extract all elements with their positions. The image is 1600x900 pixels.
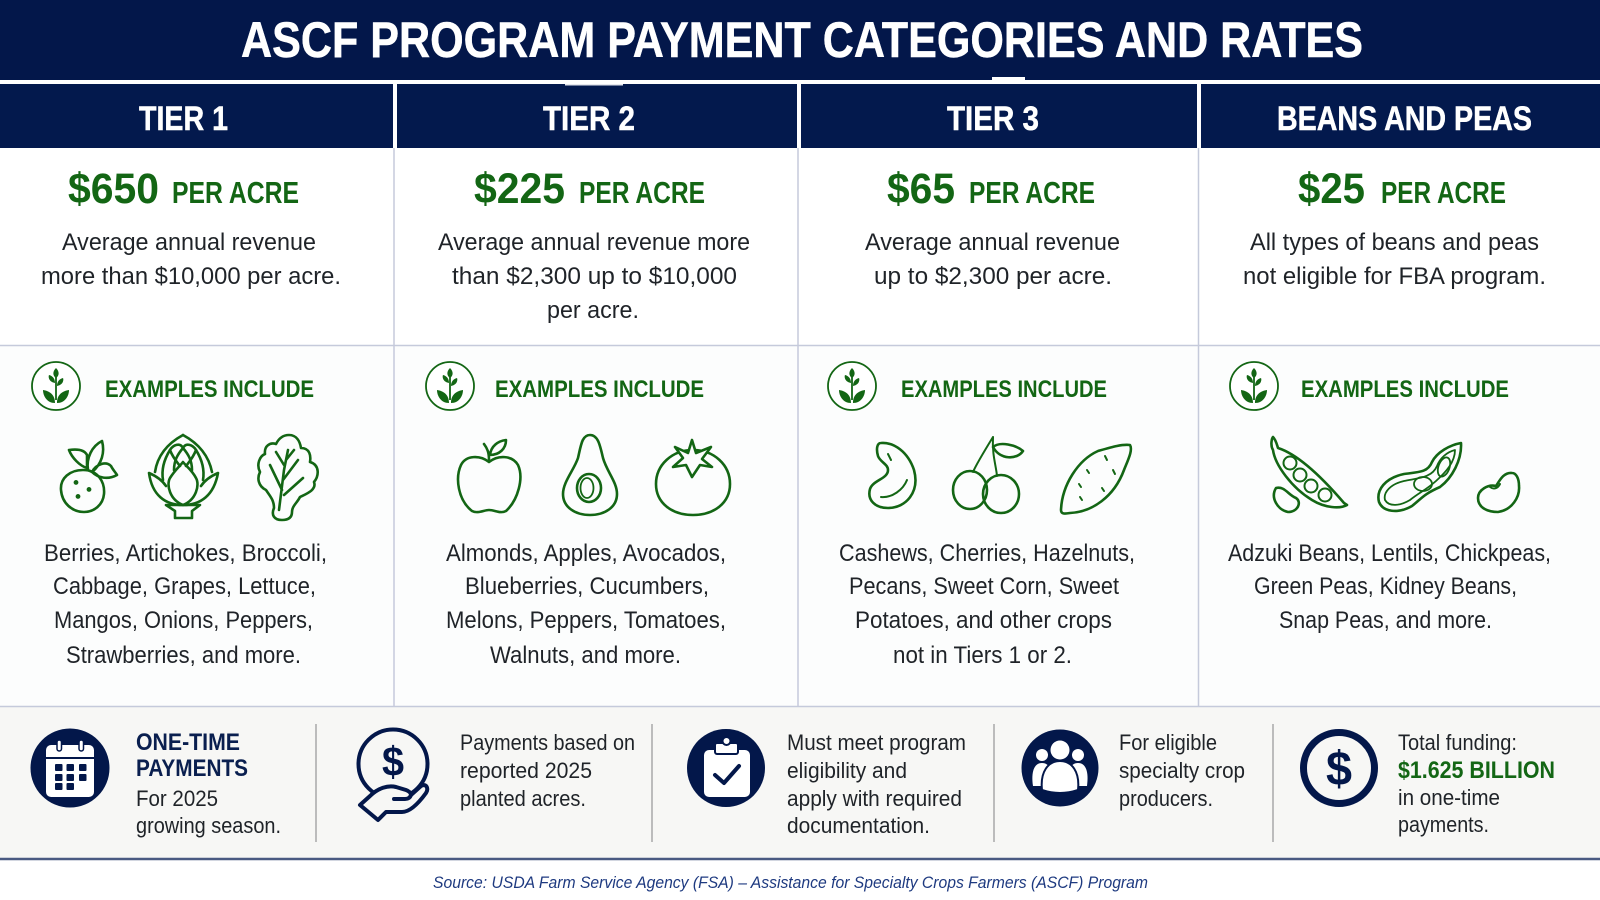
text: payments based on planted acres [460,730,635,811]
heading: examples include: EXAMPLES INCLUDE [105,376,314,403]
crop list: tier 3 [839,540,1135,669]
crop list: tier 2: Almonds, Apples, Avocados, [446,540,726,567]
crop list: tier 3: Potatoes, and other crops [855,607,1112,634]
description: tier 1 [41,229,341,290]
description: beans and peas [1243,229,1546,290]
icon: hand holding dollar [358,730,428,820]
description: tier 3 [865,229,1120,290]
icon: berry [61,441,117,512]
description: tier 3: up to $2,300 per acre. [874,263,1112,290]
examples panel: tier 2 [426,362,730,669]
column header: tier 2: TIER 2 [543,100,635,138]
icon: calendar [30,728,110,808]
title banner [0,0,1600,80]
icon: tomato [656,440,730,515]
fact: eligibility and documentation [687,729,966,838]
icon: plant badge [1230,362,1278,410]
column header: tier 3: TIER 3 [947,100,1039,138]
crop list: tier 3: Cashews, Cherries, Hazelnuts, [839,540,1135,567]
description: beans and peas: All types of beans and peas [1250,229,1539,256]
column header: beans and peas [1201,84,1600,148]
grid lines [0,148,1600,706]
rate: $225 per acre: $225 [474,165,565,213]
crop list: beans and peas: Adzuki Beans, Lentils, Chickpeas, [1228,540,1551,567]
icon: edamame pod [1378,443,1461,511]
text: total funding: payments. [1398,812,1489,837]
crop list: tier 1 [44,540,327,669]
rate: $25 per acre: $25 [1298,165,1365,213]
text: total funding: in one-time [1398,785,1500,810]
heading: examples include: EXAMPLES INCLUDE [1301,376,1509,403]
text: one-time payments: PAYMENTS [136,755,248,782]
icon: clipboard [687,729,765,807]
rate panel: tier 1 [41,165,341,290]
description: tier 2: than $2,300 up to $10,000 [452,263,737,290]
fact: payments based on planted acres [358,730,635,820]
description: beans and peas: not eligible for FBA program. [1243,263,1546,290]
description: tier 1: Average annual revenue [62,229,316,256]
crop list: tier 1: Berries, Artichokes, Broccoli, [44,540,327,567]
rate: $225 per acre: PER ACRE [579,175,705,210]
crop list: tier 3: not in Tiers 1 or 2. [893,642,1072,669]
text: payments based on planted acres: Payments based on [460,730,635,755]
crop list: beans and peas: Snap Peas, and more. [1279,607,1492,634]
fact: one-time payments [30,728,281,838]
fact: total funding [1304,730,1555,837]
text: eligible producers [1119,730,1245,811]
icon: hand holding dollar: $ [382,738,404,785]
crop list: tier 2: Walnuts, and more. [490,642,681,669]
text: payments based on planted acres: planted acres. [460,786,586,811]
text: eligibility and documentation [787,730,966,838]
description: tier 2: per acre. [547,297,639,324]
rate panel: tier 2 [438,165,750,324]
crop list: tier 1: Cabbage, Grapes, Lettuce, [53,573,316,600]
icon: apple [458,440,520,512]
rate panel: beans and peas [1243,165,1546,290]
crop list: tier 1: Strawberries, and more. [66,642,301,669]
crop list: tier 3: Pecans, Sweet Corn, Sweet [849,573,1119,600]
text: eligible producers: specialty crop [1119,758,1245,783]
text: one-time payments: ONE-TIME [136,729,240,756]
text: payments based on planted acres: reported 2025 [460,758,592,783]
text: eligible producers: For eligible [1119,730,1217,755]
text: eligibility and documentation: apply with required [787,786,962,811]
examples panel: tier 3 [828,362,1135,669]
fact: eligible producers [1022,730,1245,811]
rate: $225 per acre [474,165,705,213]
rate: $650 per acre [68,165,299,213]
heading: examples include: EXAMPLES INCLUDE [901,376,1107,403]
column header: tier 2 [397,84,797,148]
description: tier 1: more than $10,000 per acre. [41,263,341,290]
rate panel: tier 3 [865,165,1120,290]
icon: artichoke [149,435,218,518]
text: eligibility and documentation: Must meet program [787,730,966,755]
icon: lettuce [258,435,318,520]
crop list: tier 2: Blueberries, Cucumbers, [465,573,709,600]
text: total funding: Total funding: [1398,730,1517,755]
crop list: tier 2 [446,540,726,669]
icon: sweet potato [1061,445,1131,514]
icon: avocado [563,435,617,515]
text: eligibility and documentation: eligibility and [787,758,907,783]
source line: Source: USDA Farm Service Agency (FSA) – Assistance for Specialty Crops Farmers (ASCF) Program [433,873,1148,892]
icon: dollar coin [1304,732,1374,804]
crop list: beans and peas [1228,540,1551,634]
rate: $25 per acre [1298,165,1506,213]
rate: $65 per acre [887,165,1095,213]
column header: tier 3 [801,77,1197,148]
icon: dollar coin: $ [1326,743,1352,796]
description: tier 3: Average annual revenue [865,229,1120,256]
text: one-time payments [136,729,281,838]
icon: plant badge [32,362,80,410]
rate: $650 per acre: PER ACRE [172,175,299,210]
icon: cherries [953,437,1023,513]
examples panel: tier 1 [32,362,327,669]
icon: plant badge [828,362,876,410]
column header: tier 1 [0,84,393,148]
rate: $25 per acre: PER ACRE [1381,175,1506,210]
column header: tier 1: TIER 1 [139,100,228,138]
column header: beans and peas: BEANS AND PEAS [1277,100,1532,138]
text: total funding [1398,730,1555,837]
examples panel: beans and peas [1228,362,1551,634]
rate: $650 per acre: $650 [68,165,159,213]
icon: group of people [1022,730,1098,806]
text: eligible producers: producers. [1119,786,1213,811]
text: one-time payments: For 2025 [136,786,218,811]
crop list: tier 2: Melons, Peppers, Tomatoes, [446,607,726,634]
icon: cashew [869,443,915,508]
footer facts strip [0,706,1600,859]
crop list: tier 1: Mangos, Onions, Peppers, [54,607,313,634]
description: tier 2: Average annual revenue more [438,229,750,256]
text: one-time payments: growing season. [136,813,281,838]
icon: plant badge [426,362,474,410]
icon: kidney bean [1478,473,1519,512]
rate: $65 per acre: $65 [887,165,955,213]
text: total funding: $1.625 BILLION [1398,757,1555,784]
description: tier 2 [438,229,750,324]
heading: examples include: EXAMPLES INCLUDE [495,376,704,403]
icon: pea pod [1271,437,1347,512]
title banner: ASCF PROGRAM PAYMENT CATEGORIES AND RATES [241,12,1363,68]
crop list: beans and peas: Green Peas, Kidney Beans, [1254,573,1517,600]
rate: $65 per acre: PER ACRE [969,175,1095,210]
text: eligibility and documentation: documentation. [787,813,930,838]
